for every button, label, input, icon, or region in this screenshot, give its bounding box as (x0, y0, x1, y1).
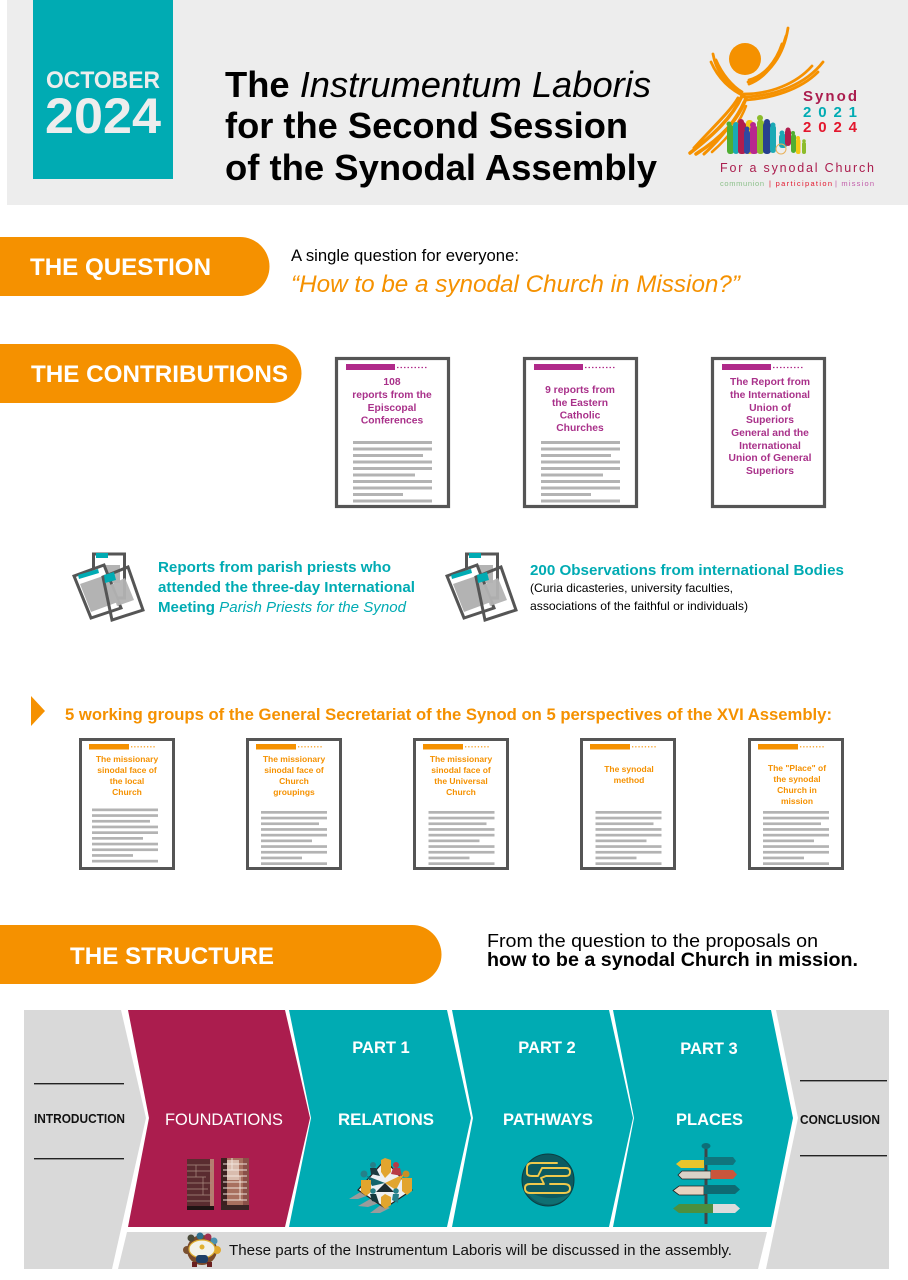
parish priests text: attended the three-day International (158, 579, 415, 596)
document: international union of superiors (712, 358, 824, 506)
document: church groupings (248, 740, 340, 868)
document: place of the synodal church (750, 740, 842, 868)
document: international union of superiors: Union of (749, 403, 791, 414)
title: The Instrumentum Laboris (225, 64, 651, 105)
chevron: part 1 relations (289, 1010, 471, 1227)
logo: synod dates: Synod (803, 88, 857, 105)
chevron: part 1 relations: PART 1 (352, 1039, 410, 1057)
document: international union of superiors: Union of General (729, 453, 812, 464)
logo: synod dates: 2024 (803, 119, 858, 136)
chevron: introduction (24, 1010, 146, 1269)
document: episcopal conferences: Conferences (361, 416, 423, 426)
section banner: the contributions (0, 344, 302, 403)
logo: synod 2021-2024 (690, 28, 874, 188)
icon: brick walls (187, 1158, 249, 1210)
assembly note bar: These parts of the Instrumentum Laboris will be discussed in the assembly. (229, 1242, 732, 1259)
title: of the Synodal Assembly (225, 147, 658, 188)
observations text: (Curia dicasteries, university faculties, (530, 581, 733, 595)
document: international union of superiors: International (739, 441, 801, 452)
document: eastern catholic churches: the Eastern (552, 398, 608, 409)
document: international union of superiors: The Report from (730, 377, 810, 388)
document: universal church: Church (446, 787, 476, 797)
question text: A single question for everyone: (291, 246, 519, 265)
observations text: 200 Observations from international Bodies (530, 562, 844, 579)
document: episcopal conferences: 108 (383, 377, 401, 388)
observations text: associations of the faithful or individuals) (530, 599, 748, 613)
document: international union of superiors: Superiors (746, 415, 794, 426)
icon: round table assembly (183, 1232, 221, 1267)
document: episcopal conferences: reports from the (352, 390, 432, 401)
document: synodal method: method (614, 775, 644, 785)
document: international union of superiors: Superiors (746, 466, 794, 477)
document: church groupings: groupings (273, 787, 315, 797)
parish priests text: Meeting Parish Priests for the Synod (158, 599, 407, 616)
document: local church: Church (112, 787, 142, 797)
document: episcopal conferences: Episcopal (368, 403, 416, 414)
chevron: part 3 places (613, 1010, 793, 1227)
document: eastern catholic churches: Churches (556, 423, 604, 434)
document: local church: the local (110, 776, 144, 786)
chevron: introduction: INTRODUCTION (34, 1111, 125, 1126)
document: universal church: the Universal (434, 776, 488, 786)
section banner: the structure: THE STRUCTURE (70, 943, 274, 970)
document: eastern catholic churches: 9 reports from (545, 385, 615, 396)
assembly note bar (118, 1232, 767, 1269)
document: eastern catholic churches: Catholic (560, 410, 601, 422)
section banner: the question (0, 237, 270, 296)
date block: OCTOBER (46, 67, 160, 94)
document: universal church: sinodal face of (431, 765, 491, 775)
document: place of the synodal church: The "Place" of (768, 763, 826, 773)
document: place of the synodal church: mission (781, 796, 813, 806)
structure text (487, 930, 858, 971)
question text (291, 246, 741, 298)
logo: tagline: communion (720, 179, 764, 188)
title: for the Second Session (225, 105, 628, 146)
arrow marker (31, 696, 45, 726)
parish priests text (158, 559, 415, 616)
chevron: part 2 pathways: PATHWAYS (503, 1111, 593, 1129)
document: episcopal conferences (336, 358, 448, 506)
chevron: conclusion (766, 1010, 889, 1269)
document: place of the synodal church: the synodal (773, 774, 821, 784)
date block (33, 0, 173, 179)
section banner: the question: THE QUESTION (30, 254, 211, 281)
chevron: foundations: FOUNDATIONS (165, 1111, 283, 1129)
question text: “How to be a synodal Church in Mission?” (291, 271, 741, 298)
document: local church: The missionary (96, 754, 158, 764)
document: church groupings: Church (279, 776, 309, 786)
logo: synod dates (803, 88, 858, 136)
section banner: the contributions: THE CONTRIBUTIONS (31, 361, 288, 388)
document: universal church: The missionary (430, 754, 492, 764)
icon: winding path (522, 1154, 574, 1206)
working groups heading: 5 working groups of the General Secretariat of the Synod on 5 perspectives of the XVI Assembly: (65, 706, 832, 724)
logo: walking people (726, 115, 806, 154)
structure text: how to be a synodal Church in mission. (487, 950, 858, 971)
chevron: conclusion: CONCLUSION (800, 1112, 880, 1127)
chevron: foundations (128, 1010, 310, 1227)
structure text: From the question to the proposals on (487, 930, 818, 951)
section banner: the structure (0, 925, 442, 984)
document: international union of superiors: General and the (731, 428, 809, 439)
document: international union of superiors: the International (730, 390, 810, 401)
logo: tagline: | mission (835, 179, 874, 188)
document: synodal method: The synodal (604, 764, 654, 774)
icon: parish priests documents (74, 553, 143, 620)
chevron: part 2 pathways: PART 2 (518, 1039, 576, 1057)
icon: signpost (673, 1143, 740, 1224)
document: universal church (414, 740, 508, 868)
document: synodal method (582, 740, 674, 868)
document: church groupings: sinodal face of (264, 765, 324, 775)
chevron: part 3 places: PART 3 (680, 1040, 738, 1058)
document: local church (80, 740, 174, 868)
logo: synod dates: 2021 (803, 104, 857, 121)
chevron: part 2 pathways (452, 1010, 633, 1227)
document: eastern catholic churches (524, 358, 636, 506)
document: local church: sinodal face of (97, 765, 157, 775)
logo: tagline: For a synodal Church (720, 161, 874, 175)
logo: tagline (720, 161, 874, 188)
title (225, 64, 658, 188)
header band (7, 0, 908, 205)
parish priests text: Reports from parish priests who (158, 559, 391, 576)
observations text (530, 562, 844, 613)
logo: sun and figure (690, 28, 823, 154)
date block: 2024 (45, 88, 161, 144)
icon: observations documents (447, 553, 516, 620)
document: place of the synodal church: Church in (777, 785, 817, 795)
document: church groupings: The missionary (263, 754, 325, 764)
icon: people around table (349, 1158, 412, 1213)
chevron: part 3 places: PLACES (676, 1111, 743, 1129)
chevron: part 1 relations: RELATIONS (338, 1111, 434, 1129)
logo: tagline: | participation (769, 179, 832, 188)
